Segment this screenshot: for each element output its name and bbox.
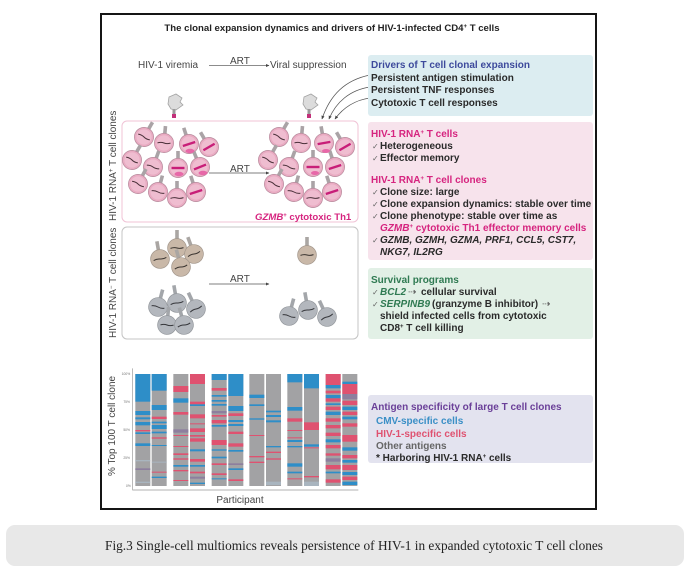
tan clone before ART bbox=[148, 230, 206, 279]
label: HIV-1 RNA- clones: T cell clones bbox=[108, 228, 119, 286]
arrow: ART bbox=[209, 274, 269, 285]
panel: HIV-1 RNA+ cells and clones: NKG7, IL2RG bbox=[380, 247, 443, 258]
panel: HIV-1 RNA+ cells and clones: T cells bbox=[424, 129, 458, 140]
panel: survival programs: cellular survival bbox=[421, 287, 497, 298]
arrow: ART: ART bbox=[230, 164, 250, 175]
panel: HIV-1 RNA+ cells and clones: + bbox=[420, 130, 424, 136]
panel: HIV-1 RNA+ cells and clones: HIV-1 RNA bbox=[371, 129, 420, 140]
panel: antigen specificity legend: * Harboring HIV-1 RNA bbox=[376, 453, 483, 464]
panel: RNA negative clones bbox=[122, 227, 358, 339]
panel: antigen specificity legend: HIV-1-specific cells bbox=[376, 429, 467, 440]
bar 10 bbox=[304, 374, 319, 486]
panel: HIV-1 RNA+ cells and clones: cytotoxic Th1 effector memory cells bbox=[413, 223, 587, 234]
timeline: viremia to suppression bbox=[138, 56, 347, 71]
panel: survival programs: (granzyme B inhibitor) bbox=[432, 299, 538, 310]
panel: HIV-1 RNA+ cells and clones: T cell clones bbox=[424, 175, 487, 186]
panel: survival programs: ✓ bbox=[372, 300, 379, 309]
gray clone after ART bbox=[277, 291, 339, 329]
stacked bar chart: 75% bbox=[123, 400, 130, 404]
title: The clonal expansion dynamics and drivers of HIV-1-infected CD4 bbox=[164, 23, 464, 34]
label: HIV-1 RNA+ clones: HIV-1 RNA bbox=[108, 172, 119, 221]
stacked bar chart bbox=[122, 368, 358, 490]
tan clone after ART bbox=[298, 237, 316, 264]
panel: HIV-1 RNA+ cells and clones: ✓ bbox=[372, 154, 379, 163]
cell cluster before ART bbox=[119, 117, 222, 208]
panel: drivers: Persistent antigen stimulation bbox=[371, 73, 514, 84]
panel: antigen specificity legend: CMV-specific cells bbox=[376, 416, 464, 427]
panel: drivers bbox=[368, 55, 593, 116]
timeline: viremia to suppression: ART bbox=[230, 56, 250, 67]
panel: HIV-1 RNA+ cells and clones bbox=[368, 122, 593, 260]
panel: survival programs: BCL2 bbox=[380, 287, 407, 298]
panel: HIV-1 RNA+ cells and clones: Heterogeneous bbox=[380, 141, 453, 152]
panel: survival programs: + bbox=[400, 324, 404, 330]
panel: survival programs: ⇢ bbox=[542, 299, 550, 310]
stacked bar chart: 25% bbox=[123, 456, 130, 460]
panel: HIV-1 RNA+ cells and clones: ✓ bbox=[372, 212, 379, 221]
stacked bar chart: 0% bbox=[126, 484, 131, 488]
panel: antigen specificity legend: Other antigens bbox=[376, 441, 447, 452]
bar 6 bbox=[228, 374, 243, 486]
panel: HIV-1 RNA+ cells and clones: ✓ bbox=[372, 188, 379, 197]
panel: drivers: Persistent TNF responses bbox=[371, 85, 495, 96]
caption bbox=[6, 525, 684, 566]
panel: survival programs: ✓ bbox=[372, 288, 379, 297]
label: GZMB+ cytotoxic Th1: cytotoxic Th1 bbox=[287, 212, 352, 223]
bar 7 bbox=[249, 374, 264, 486]
panel: survival programs: ⇢ bbox=[408, 287, 416, 298]
panel: drivers: Cytotoxic T cell responses bbox=[371, 98, 498, 109]
panel: HIV-1 RNA+ cells and clones: HIV-1 RNA bbox=[371, 175, 420, 186]
panel: antigen specificity legend: Antigen specificity of large T cell clones bbox=[371, 402, 562, 413]
panel: survival programs: shield infected cells from cytotoxic bbox=[380, 311, 547, 322]
arrow: ART bbox=[209, 164, 269, 175]
panel: HIV-1 RNA+ cells and clones: GZMB bbox=[380, 223, 409, 234]
panel: HIV-1 RNA+ cells and clones: Clone expansion dynamics: stable over time bbox=[380, 199, 592, 210]
bar 1 bbox=[135, 374, 150, 486]
bar 4 bbox=[190, 374, 205, 486]
panel: HIV-1 RNA+ cells and clones: Clone phenotype: stable over time as bbox=[380, 211, 558, 222]
figure frame bbox=[101, 14, 596, 509]
bar 2 bbox=[152, 374, 167, 486]
label: HIV-1 RNA+ clones: T cell clones bbox=[108, 111, 119, 169]
panel: survival programs: CD8 bbox=[380, 323, 400, 334]
bar 5 bbox=[212, 374, 227, 486]
x-axis label: Participant bbox=[216, 495, 264, 506]
y-axis label: % Top 100 T cell clone bbox=[107, 375, 118, 476]
panel: HIV-1 RNA+ cells and clones: Effector memory bbox=[380, 153, 460, 164]
arrow: ART: ART bbox=[230, 274, 250, 285]
panel: HIV-1 RNA+ cells and clones: Clone size: large bbox=[380, 187, 460, 198]
gray clone before ART bbox=[146, 284, 208, 337]
panel: HIV-1 RNA+ cells and clones: ✓ bbox=[372, 142, 379, 151]
panel: HIV-1 RNA+ cells and clones: + bbox=[420, 176, 424, 182]
timeline: viremia to suppression: HIV-1 viremia bbox=[138, 60, 198, 71]
caption: Fig.3 Single-cell multiomics reveals persistence of HIV-1 in expanded cytotoxic T cell clones bbox=[105, 538, 603, 553]
panel: antigen specificity legend bbox=[368, 395, 593, 464]
cell cluster after ART bbox=[255, 117, 358, 208]
label: HIV-1 RNA+ clones: + bbox=[109, 168, 115, 172]
panel: survival programs: T cell killing bbox=[404, 323, 464, 334]
bar 8 bbox=[266, 374, 281, 486]
label: GZMB+ cytotoxic Th1: + bbox=[283, 213, 287, 219]
panel: survival programs: Survival programs bbox=[371, 275, 459, 286]
timeline: viremia to suppression: Viral suppression bbox=[270, 60, 347, 71]
panel: survival programs: SERPINB9 bbox=[380, 299, 430, 310]
arrows: drivers to clones bbox=[322, 75, 370, 119]
bar 11 bbox=[326, 374, 341, 486]
label: GZMB+ cytotoxic Th1: GZMB bbox=[255, 212, 283, 223]
label: HIV-1 RNA- clones: − bbox=[109, 285, 115, 289]
stacked bar chart: 50% bbox=[123, 428, 130, 432]
stacked bar chart: 100% bbox=[122, 372, 130, 376]
title: T cells bbox=[467, 23, 500, 34]
bar 9 bbox=[287, 374, 302, 486]
panel: drivers: Drivers of T cell clonal expansion bbox=[371, 60, 530, 71]
panel: HIV-1 RNA+ cells and clones: GZMB, GZMH, GZMA, PRF1, CCL5, CST7, bbox=[380, 235, 576, 246]
label: HIV-1 RNA- clones: HIV-1 RNA bbox=[108, 289, 119, 338]
panel: antigen specificity legend: cells bbox=[486, 453, 512, 464]
panel: RNA positive clones bbox=[119, 117, 358, 223]
bar 3 bbox=[173, 374, 188, 486]
icon: antigen left bbox=[168, 94, 183, 118]
panel: HIV-1 RNA+ cells and clones: ✓ bbox=[372, 236, 379, 245]
panel: HIV-1 RNA+ cells and clones: ✓ bbox=[372, 200, 379, 209]
panel: survival programs bbox=[368, 268, 593, 339]
panel: antigen specificity legend: + bbox=[483, 454, 487, 460]
title: + bbox=[464, 24, 468, 30]
bar 12 bbox=[342, 374, 357, 486]
icon: antigen right bbox=[303, 94, 318, 118]
panel: HIV-1 RNA+ cells and clones: + bbox=[409, 224, 413, 230]
